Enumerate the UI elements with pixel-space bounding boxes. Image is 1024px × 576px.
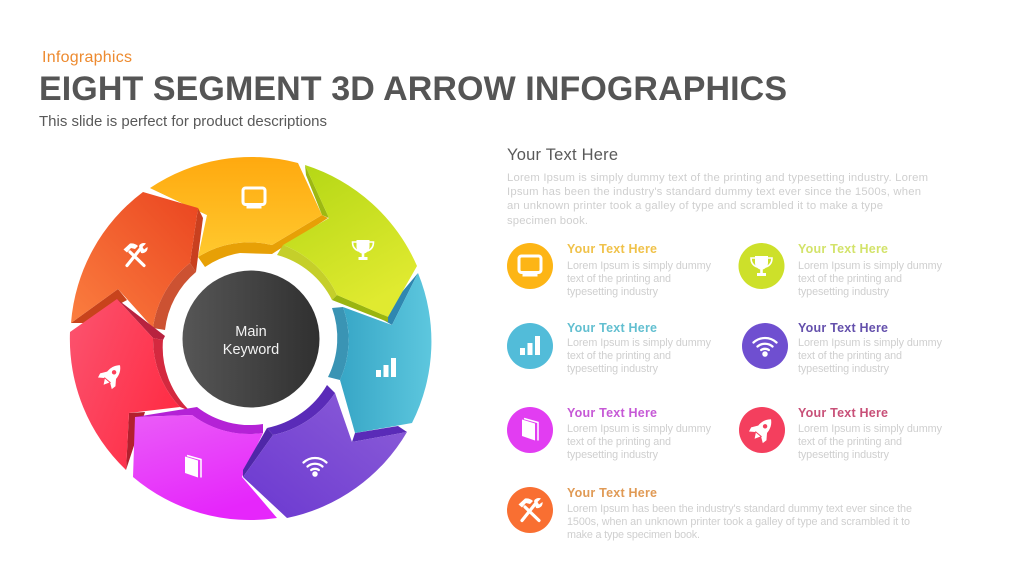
item: orange: 1500s, when an unknown printer took a galley of type and scrambled it to — [567, 516, 910, 528]
item: magenta: typesetting industry — [567, 449, 659, 461]
segment: blue bars — [328, 273, 431, 433]
item: purple: Your Text Here — [798, 321, 888, 335]
title: EIGHT SEGMENT 3D ARROW INFOGRAPHICS — [39, 70, 787, 108]
item: yellow — [507, 242, 712, 298]
item: purple: typesetting industry — [798, 363, 890, 375]
centre hub: Main Keyword: Main — [235, 324, 267, 340]
intro paragraph: an unknown printer took a galley of type and scrambled it to make a type — [507, 200, 883, 212]
segment: orange tools — [71, 192, 203, 330]
intro paragraph — [507, 172, 928, 227]
item: yellow: Lorem Ipsum is simply dummy — [567, 260, 712, 272]
item: red: typesetting industry — [798, 449, 890, 461]
segment: red rocket — [70, 299, 190, 470]
segment: lime trophy — [277, 165, 417, 322]
item: red — [739, 406, 943, 461]
arrow wheel — [70, 157, 431, 520]
intro paragraph: Lorem Ipsum is simply dummy text of the printing and typesetting industry. Lorem — [507, 172, 928, 184]
item: red: text of the printing and — [798, 436, 902, 448]
intro paragraph: Ipsum has been the industry's standard dummy text ever since the 1500s, when — [507, 186, 921, 198]
subtitle: This slide is perfect for product descriptions — [39, 113, 327, 130]
item: yellow: typesetting industry — [567, 286, 659, 298]
item: lime — [738, 242, 943, 298]
item: lime: Your Text Here — [798, 242, 888, 256]
item: magenta — [507, 406, 712, 461]
item: orange — [507, 486, 912, 541]
item: magenta: Lorem Ipsum is simply dummy — [567, 423, 712, 435]
item: lime: Lorem Ipsum is simply dummy — [798, 260, 943, 272]
item: lime: typesetting industry — [798, 286, 890, 298]
item: red: Your Text Here — [798, 406, 888, 420]
item: orange: Lorem Ipsum has been the industry's standard dummy text ever since the — [567, 503, 912, 515]
item: orange: make a type specimen book. — [567, 529, 700, 541]
eyebrow: Infographics: Infographics — [42, 49, 132, 66]
item: lime: text of the printing and — [798, 273, 902, 285]
segment: purple wifi — [243, 385, 407, 518]
item: yellow: Your Text Here — [567, 242, 657, 256]
item: magenta: Your Text Here — [567, 406, 657, 420]
item: yellow: text of the printing and — [567, 273, 671, 285]
item: blue: text of the printing and — [567, 350, 671, 362]
item: blue — [507, 321, 712, 375]
segment: yellow monitor — [150, 157, 328, 267]
intro paragraph: specimen book. — [507, 215, 588, 227]
item: purple: text of the printing and — [798, 350, 902, 362]
item: blue: Lorem Ipsum is simply dummy — [567, 337, 712, 349]
item: purple — [742, 321, 943, 375]
centre hub: Main Keyword: Keyword — [223, 342, 279, 358]
item: orange: Your Text Here — [567, 486, 657, 500]
item: blue: Your Text Here — [567, 321, 657, 335]
intro heading: Your Text Here — [507, 146, 618, 164]
item: blue: typesetting industry — [567, 363, 659, 375]
item: magenta: text of the printing and — [567, 436, 671, 448]
centre hub: Main Keyword — [182, 270, 320, 408]
item: purple: Lorem Ipsum is simply dummy — [798, 337, 943, 349]
item: red: Lorem Ipsum is simply dummy — [798, 423, 943, 435]
segment: magenta book — [133, 407, 277, 520]
